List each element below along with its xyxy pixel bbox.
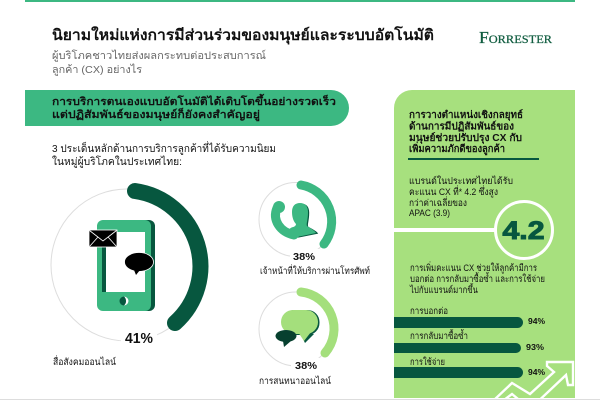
title: นิยามใหม่แห่งการมีส่วนร่วมของมนุษย์และระบบอัตโนมัติ xyxy=(52,25,434,45)
label: social media: สื่อสังคมออนไลน์ xyxy=(53,355,116,368)
panel heading: ด้านการมีปฏิสัมพันธ์ของ xyxy=(409,120,514,132)
bar chart: advocacy, repurchase, spend: 94% xyxy=(528,316,545,326)
CX score text: กว่าค่าเฉลี่ยของ xyxy=(409,196,467,209)
value: 41%: 41% xyxy=(125,330,153,347)
CX score text: APAC (3.9) xyxy=(409,208,450,219)
value: 38%: 38% xyxy=(293,251,316,263)
subtitle: ผู้บริโภคชาวไทยส่งผลกระทบต่อประสบการณ์ xyxy=(52,49,266,62)
CX benefit text: ไปกับแบรนด์มากขึ้น xyxy=(409,283,478,296)
panel heading: เพิ่มความภักดีของลูกค้า xyxy=(409,141,505,156)
panel heading xyxy=(409,109,523,156)
logo: Forrester: Forrester xyxy=(479,28,552,47)
subtitle: ลูกค้า (CX) อย่างไร xyxy=(52,63,142,76)
icon: smartphone with message bubbles xyxy=(89,220,155,311)
CX score text xyxy=(409,175,513,219)
value: 38%: 38% xyxy=(295,360,318,372)
score badge: 4.2 xyxy=(496,202,552,258)
banner: key message: แต่ปฏิสัมพันธ์ของมนุษย์ก็ยังคงสำคัญอยู่ xyxy=(52,107,260,122)
banner: key message: การบริการตนเองแบบอัตโนมัติได้เติบโตขึ้นอย่างรวดเร็ว xyxy=(52,93,336,108)
chart: live chat 38% xyxy=(259,292,334,387)
CX benefit text: บอกต่อ การกลับมาซื้อซ้ำ และการใช้จ่าย xyxy=(410,272,545,285)
icon: telephone handset and person xyxy=(273,201,318,239)
CX score text: แบรนด์ในประเทศไทยได้รับ xyxy=(409,175,513,187)
bar chart: advocacy, repurchase, spend: 94% xyxy=(528,367,545,377)
icon: rising arrow xyxy=(493,362,573,400)
CX score text: คะแนน CX ที่* 4.2 ซึ่งสูง xyxy=(409,185,498,198)
bar chart: advocacy, repurchase, spend: 93% xyxy=(526,342,544,352)
chart: social media 41% xyxy=(51,189,203,368)
CX benefit text xyxy=(409,261,545,296)
intro text: ในหมู่ผู้บริโภคในประเทศไทย: xyxy=(52,155,182,168)
panel heading: การวางตำแหน่งเชิงกลยุทธ์ xyxy=(409,109,523,121)
subtitle xyxy=(52,49,266,76)
panel: strategy xyxy=(394,90,575,400)
label: live chat: การสนทนาออนไลน์ xyxy=(259,375,331,387)
label: phone agent: เจ้าหน้าที่ให้บริการผ่านโทรศัพท์ xyxy=(260,264,370,277)
bar chart: advocacy, repurchase, spend: การบอกต่อ xyxy=(410,306,448,317)
icon: chat bubbles xyxy=(274,310,320,347)
panel heading: มนุษย์ช่วยปรับปรุง CX กับ xyxy=(409,132,522,144)
chart: phone agent 38% xyxy=(259,182,370,277)
score badge: 4.2: 4.2 xyxy=(502,217,544,245)
banner: key message xyxy=(25,90,349,126)
CX benefit text: การเพิ่มคะแนน CX ช่วยให้ลูกค้ามีการ xyxy=(410,261,537,274)
intro text: 3 ประเด็นหลักด้านการบริการลูกค้าที่ได้รับความนิยม xyxy=(52,141,276,155)
bar chart: advocacy, repurchase, spend: การใช้จ่าย xyxy=(410,356,445,368)
intro text xyxy=(52,141,276,168)
bar chart: advocacy, repurchase, spend xyxy=(394,306,545,378)
bar chart: advocacy, repurchase, spend: การกลับมาซื้อซ้ำ xyxy=(410,329,468,342)
